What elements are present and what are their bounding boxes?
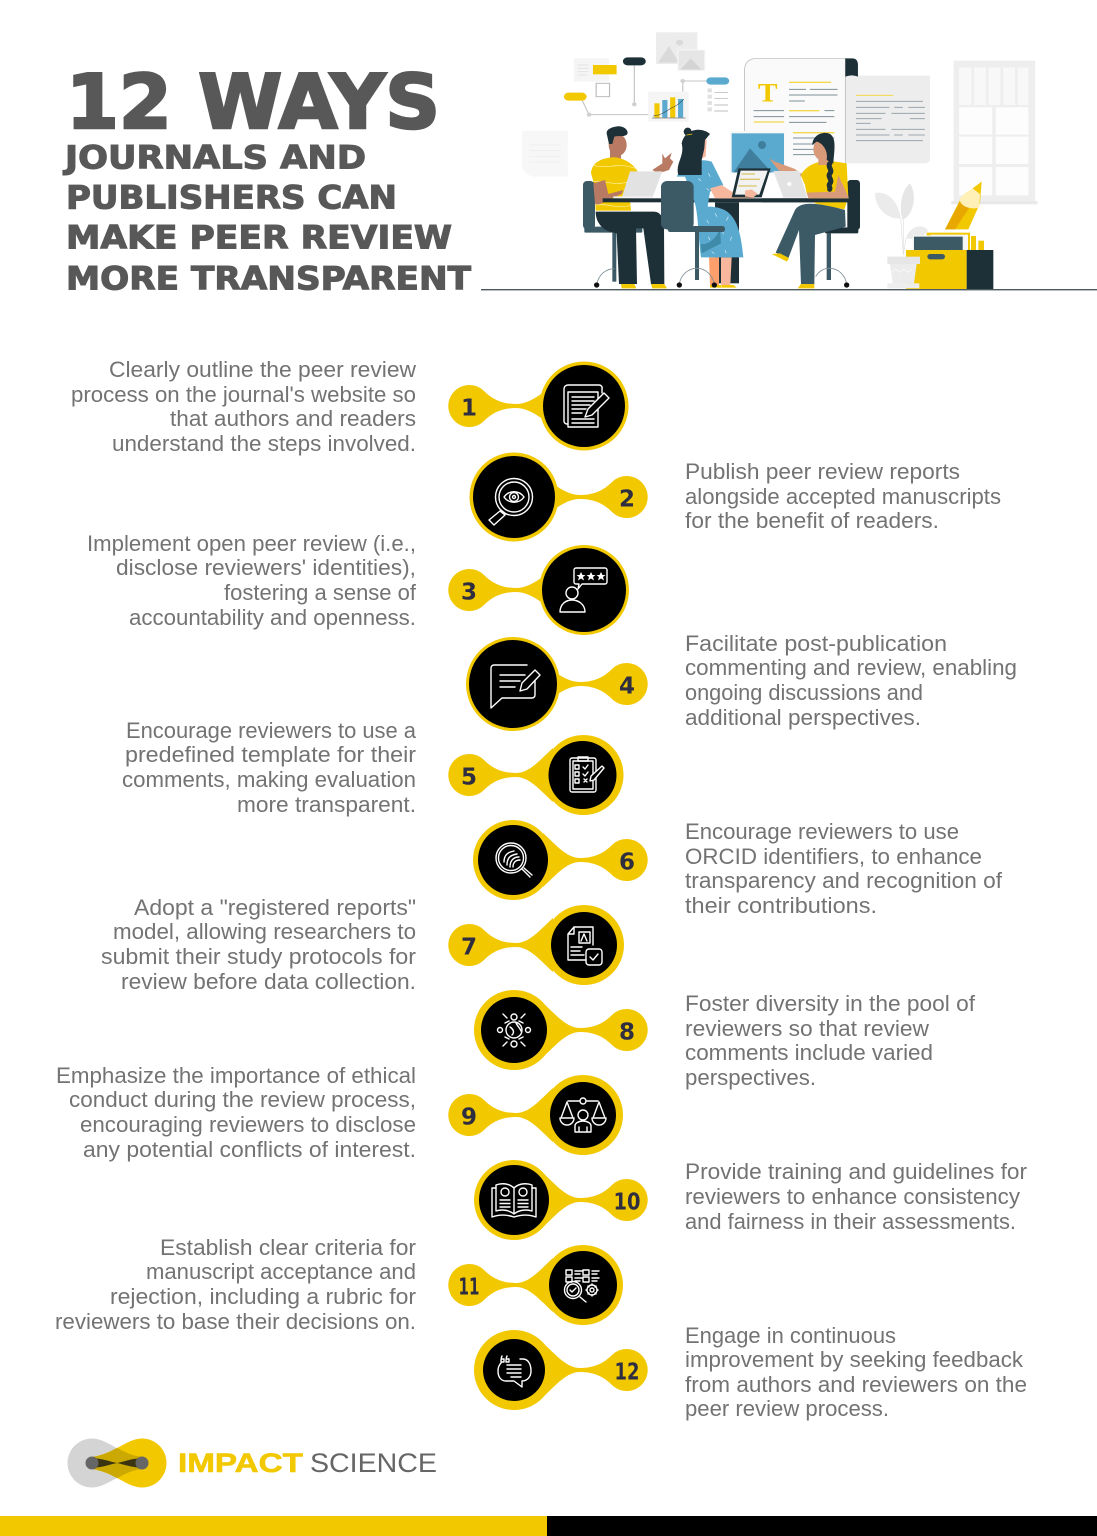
- text block 4: commenting and review, enabling: [685, 655, 1017, 680]
- pencil: [945, 182, 982, 229]
- text block 8: reviewers so that review: [685, 1016, 929, 1041]
- node 7: [448, 905, 624, 985]
- flow connector lines and pills: [564, 57, 729, 117]
- text block 12: improvement by seeking feedback: [685, 1347, 1024, 1372]
- node 12: 12: [614, 1360, 640, 1386]
- text block 11: rejection, including a rubric for: [110, 1284, 416, 1309]
- text block 10: and fairness in their assessments.: [685, 1209, 1016, 1234]
- person middle legs: [709, 257, 737, 288]
- text block 12: [685, 1323, 1027, 1421]
- text block 1: process on the journal's website so: [71, 382, 416, 407]
- text block 7: review before data collection.: [121, 969, 416, 994]
- title: MAKE PEER REVIEW: [66, 218, 452, 256]
- text block 11: [55, 1235, 416, 1334]
- faint paper sheet: [522, 131, 568, 177]
- icon: person with star rating bubble: [560, 568, 607, 612]
- text block 3: disclose reviewers' identities),: [116, 555, 416, 580]
- icon: document with approval check: [568, 927, 602, 965]
- title: PUBLISHERS CAN: [66, 178, 397, 216]
- text block 3: [87, 531, 417, 630]
- text block 6: [685, 819, 1003, 918]
- illustration: background documents and charts: [522, 32, 1037, 204]
- text block 12: from authors and reviewers on the: [685, 1372, 1027, 1397]
- text block 7: Adopt a "registered reports": [134, 895, 416, 920]
- node 9: [448, 1075, 623, 1155]
- main document with serif T: [745, 58, 858, 173]
- text block 2: alongside accepted manuscripts: [685, 484, 1001, 509]
- image thumbnails: [656, 32, 705, 71]
- person left: [591, 126, 673, 288]
- illustration: team at table: [583, 126, 860, 288]
- icon: diverse people around globe: [498, 1014, 530, 1047]
- text block 9: [56, 1063, 416, 1162]
- node 5: [448, 735, 624, 815]
- ground line: [481, 289, 1097, 290]
- node 11: [448, 1245, 623, 1325]
- text block 5: more transparent.: [237, 792, 416, 817]
- text block 5: [122, 718, 417, 817]
- checklist: [708, 88, 728, 111]
- text block 9: any potential conflicts of interest.: [83, 1137, 416, 1162]
- text block 4: ongoing discussions and: [685, 680, 923, 705]
- text block 7: model, allowing researchers to: [113, 919, 416, 944]
- icon: magnifier over fingerprint: [496, 843, 532, 877]
- text block 4: [685, 631, 1017, 730]
- text block 12: peer review process.: [685, 1396, 889, 1421]
- text block 2: [685, 459, 1001, 533]
- small bar chart: [648, 92, 689, 122]
- node 6: [473, 820, 648, 900]
- back document sheet: [845, 76, 930, 163]
- text block 11: manuscript acceptance and: [146, 1259, 416, 1284]
- text block 11: reviewers to base their decisions on.: [55, 1309, 416, 1334]
- text block 7: [101, 895, 416, 994]
- icon: comment bubble with pen: [491, 665, 540, 708]
- icon: scales of justice with person: [560, 1098, 606, 1132]
- table leg: [715, 202, 739, 283]
- chair right: [816, 180, 860, 288]
- chair left: [583, 181, 642, 288]
- text block 11: Establish clear criteria for: [160, 1235, 416, 1260]
- text block 12: Engage in continuous: [685, 1323, 896, 1348]
- text block 2: Publish peer review reports: [685, 459, 960, 484]
- text block 1: Clearly outline the peer review: [109, 357, 416, 382]
- icon: checklist, magnifier and gear: [564, 1270, 599, 1302]
- node 8: 8: [619, 1020, 635, 1046]
- node 9: 9: [461, 1104, 477, 1130]
- text block 6: transparency and recognition of: [685, 868, 1003, 893]
- title: [63, 58, 471, 298]
- blue picture frame: [730, 131, 786, 174]
- table top: [603, 198, 850, 202]
- person right: [762, 133, 850, 288]
- icon: open book with marks: [492, 1184, 536, 1217]
- logo mark: [68, 1438, 166, 1488]
- yellow box with files: [906, 233, 993, 289]
- window: [951, 61, 1037, 204]
- logo wordmark: [178, 1448, 437, 1478]
- logo: [68, 1438, 437, 1488]
- text block 4: Facilitate post-publication: [685, 631, 947, 656]
- text block 10: [685, 1159, 1027, 1234]
- text block 3: fostering a sense of: [224, 580, 417, 605]
- node 4: [466, 637, 648, 731]
- text block 3: accountability and openness.: [129, 605, 416, 630]
- node 3: 3: [461, 580, 477, 606]
- node 7: 7: [461, 934, 477, 960]
- text block 4: additional perspectives.: [685, 705, 921, 730]
- text block 8: [685, 991, 976, 1090]
- text block 9: encouraging reviewers to disclose: [80, 1112, 416, 1137]
- title: JOURNALS AND: [63, 138, 366, 176]
- text block 8: perspectives.: [685, 1065, 816, 1090]
- chair middle: [661, 181, 725, 288]
- main document with serif T: T: [758, 79, 778, 108]
- icon: clipboard checklist: [570, 757, 604, 792]
- text block 6: ORCID identifiers, to enhance: [685, 844, 982, 869]
- text block 10: Provide training and guidelines for: [685, 1159, 1027, 1184]
- node 11: 11: [458, 1274, 480, 1300]
- node 4: 4: [619, 674, 635, 700]
- text block 8: Foster diversity in the pool of: [685, 991, 976, 1016]
- node 1: 1: [461, 396, 477, 422]
- text block 5: predefined template for their: [125, 742, 416, 767]
- text block 9: Emphasize the importance of ethical: [56, 1063, 416, 1088]
- text block 1: understand the steps involved.: [112, 431, 416, 456]
- node 5: 5: [461, 764, 477, 790]
- tablet: [732, 168, 771, 197]
- person middle: [677, 128, 758, 257]
- title: 12 WAYS: [66, 58, 440, 146]
- text block 6: their contributions.: [685, 893, 877, 918]
- icon: magnifier with eye: [489, 478, 532, 525]
- text block 1: that authors and readers: [170, 406, 416, 431]
- icon: document and pen: [564, 385, 609, 427]
- text block 7: submit their study protocols for: [101, 944, 416, 969]
- plant leaves: [875, 183, 928, 255]
- node 10: [474, 1160, 648, 1240]
- text block 5: comments, making evaluation: [122, 767, 416, 792]
- node 8: [474, 990, 648, 1070]
- note with yellow tag: [574, 58, 617, 97]
- node 6: 6: [619, 850, 635, 876]
- node 1: [448, 362, 628, 450]
- logo wordmark: SCIENCE: [310, 1448, 437, 1478]
- text block 1: [71, 357, 416, 456]
- node 12: [474, 1330, 648, 1410]
- text block 6: Encourage reviewers to use: [685, 819, 959, 844]
- node 3: [448, 545, 629, 635]
- node 2: 2: [619, 486, 635, 512]
- text block 8: comments include varied: [685, 1040, 933, 1065]
- node 10: 10: [614, 1190, 640, 1216]
- footer bar: [0, 1516, 1097, 1536]
- text block 3: Implement open peer review (i.e.,: [87, 531, 416, 556]
- node 2: [470, 452, 648, 542]
- text block 9: conduct during the review process,: [69, 1087, 416, 1112]
- title: MORE TRANSPARENT: [66, 260, 471, 298]
- plant pot: [887, 257, 920, 288]
- logo wordmark: IMPACT: [178, 1448, 304, 1478]
- text block 2: for the benefit of readers.: [685, 508, 939, 533]
- icon: quote speech bubble: [498, 1356, 531, 1387]
- illustration: plant, box and pencil: [875, 182, 993, 289]
- text block 5: Encourage reviewers to use a: [126, 718, 417, 743]
- text block 10: reviewers to enhance consistency: [685, 1184, 1020, 1209]
